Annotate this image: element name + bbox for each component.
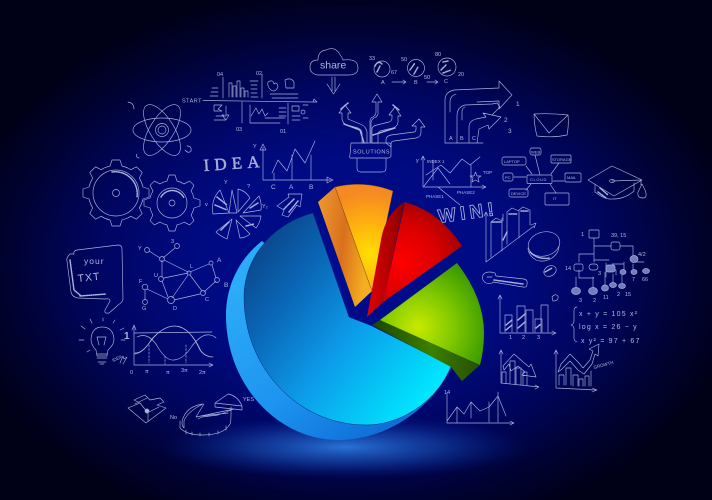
doodle: bent arrows ABC: C bbox=[472, 136, 476, 142]
doodle: line chart: Y bbox=[253, 144, 257, 150]
doodle: analytics chart with star: INDEX 1 bbox=[427, 159, 445, 164]
doodle: org tree bbox=[565, 230, 650, 304]
doodle: node network: C bbox=[205, 297, 209, 303]
doodle: cloud network: IT bbox=[553, 196, 557, 201]
doodle: falling arrow chart bbox=[499, 350, 539, 389]
doodle: node network: U bbox=[154, 273, 158, 279]
doodle: analytics chart with star bbox=[416, 156, 492, 205]
doodle: node network bbox=[138, 239, 228, 312]
doodle: bent arrows ABC: 1 bbox=[516, 101, 520, 108]
doodle: equations: x + y = 105 x² bbox=[579, 311, 638, 318]
heading: WIN!: WIN! bbox=[437, 199, 495, 228]
doodle: hatched bar chart: 3 bbox=[537, 335, 540, 341]
doodle: sine wave chart: 3π bbox=[181, 368, 188, 374]
doodle: org tree: 39, 15 bbox=[611, 233, 626, 239]
doodle: percent circles: 50 bbox=[401, 57, 407, 63]
doodle: sine wave chart bbox=[124, 325, 216, 376]
doodle: analytics chart with star: y bbox=[416, 158, 419, 164]
doodle: line chart: C bbox=[271, 184, 276, 191]
doodle: mountain line chart bbox=[444, 390, 514, 425]
red slice side bbox=[367, 202, 405, 317]
doodle: analytics chart with star: PHASE2 bbox=[457, 190, 475, 195]
doodle: 3D bar chart bbox=[484, 207, 536, 262]
doodle: equations: x y² = 97 + 67 bbox=[581, 338, 641, 345]
doodle: sine wave chart: 1 bbox=[124, 331, 130, 342]
doodle: cut pie chart: No bbox=[170, 415, 177, 421]
doodle: start timeline: 01 bbox=[280, 129, 286, 135]
doodle: cloud network: STORAGE bbox=[552, 157, 572, 162]
doodle: org tree: 2 bbox=[617, 292, 620, 298]
doodle: node network: A bbox=[217, 257, 222, 264]
doodle: speech bubble bbox=[67, 245, 123, 313]
icon: wrench bbox=[482, 272, 527, 287]
doodle: org tree: 1 bbox=[581, 232, 584, 238]
doodle: cloud network: DEVICE bbox=[511, 191, 526, 196]
doodle: coins bbox=[525, 228, 563, 279]
doodle: growth arrow chart bbox=[554, 344, 614, 392]
orange slice face bbox=[335, 184, 393, 291]
doodle: solutions box with arrows bbox=[339, 94, 425, 172]
doodle: percent circles: A bbox=[381, 80, 385, 86]
doodle: start timeline: 04 bbox=[217, 72, 223, 78]
doodle: bent arrows ABC bbox=[445, 81, 520, 143]
doodle: sine wave chart: 0 bbox=[130, 370, 133, 376]
doodle: bent arrows ABC: A bbox=[449, 136, 453, 142]
doodle: share cloud: share bbox=[320, 60, 346, 72]
doodle: percent circles: 20 bbox=[458, 72, 464, 78]
icon: open box bbox=[128, 395, 166, 423]
doodle: hatched pie: Y bbox=[224, 180, 228, 186]
doodle: cloud network: LAPTOP bbox=[504, 159, 520, 164]
doodle: node network: 3 bbox=[171, 239, 174, 245]
doodle: percent circles: 33 bbox=[369, 56, 375, 62]
doodle: sine wave chart: π bbox=[166, 370, 170, 376]
pie chart bbox=[226, 184, 484, 440]
pie: green slice bbox=[372, 263, 484, 381]
doodle: hatched pie: v bbox=[205, 202, 208, 208]
doodle: line chart bbox=[253, 141, 333, 191]
pie: red slice bbox=[367, 202, 462, 317]
doodle: cloud network: PC bbox=[505, 175, 511, 180]
doodle: hatched bar chart: 2 bbox=[522, 335, 525, 341]
doodle: share cloud bbox=[310, 49, 358, 94]
doodle: bent arrows ABC: 3 bbox=[508, 128, 512, 135]
icon: light bulb: IDEA bbox=[111, 354, 123, 363]
doodle: node network: D bbox=[173, 306, 177, 312]
pie: orange slice bbox=[318, 184, 393, 307]
doodle: org tree: 11 bbox=[603, 295, 609, 301]
doodle: bent arrows ABC: B bbox=[460, 136, 464, 142]
doodle: percent circles: C bbox=[444, 79, 448, 85]
doodle: node network: B bbox=[224, 282, 228, 289]
icon: light bulb bbox=[79, 318, 127, 364]
doodle: node network: L bbox=[190, 264, 193, 270]
doodle: start timeline: 02 bbox=[256, 71, 262, 77]
doodle: analytics chart with star: TOP bbox=[483, 170, 492, 175]
doodle: percent circles: 80 bbox=[435, 52, 441, 58]
doodle: cut pie chart bbox=[170, 394, 254, 436]
doodle: atom bbox=[128, 99, 191, 161]
doodle: sine wave chart: 2π bbox=[199, 370, 206, 376]
doodle: hatched pie bbox=[205, 180, 268, 239]
doodle: start timeline bbox=[182, 71, 317, 135]
doodle: node network: G bbox=[142, 306, 146, 312]
orange slice side bbox=[318, 187, 372, 307]
doodle: start timeline: 03 bbox=[236, 127, 242, 133]
red slice face bbox=[383, 202, 462, 302]
doodle: org tree: 2 bbox=[593, 298, 596, 304]
doodle: solutions box with arrows: SOLUTIONS bbox=[353, 150, 390, 156]
doodle: line chart: A bbox=[289, 184, 294, 191]
doodle: org tree: 15 bbox=[625, 292, 631, 298]
doodle: percent circles: 67 bbox=[391, 70, 397, 76]
doodle: speech bubble: your bbox=[84, 256, 105, 266]
doodle: striped arrow bbox=[277, 194, 302, 217]
doodle: hatched bar chart bbox=[498, 295, 558, 341]
doodle: mountain line chart: 14 bbox=[444, 390, 450, 396]
doodle: hatched pie: Y₂ bbox=[262, 204, 268, 210]
icon: graduation cap bbox=[588, 166, 646, 199]
doodle: org tree: 66 bbox=[642, 277, 648, 283]
doodle: percent circles: B bbox=[414, 80, 418, 86]
doodle: hatched bar chart: 1 bbox=[509, 335, 512, 341]
doodle: gears bbox=[82, 159, 200, 231]
doodle: cloud network bbox=[502, 148, 581, 205]
doodle: equations bbox=[571, 307, 641, 345]
doodle: percent circles bbox=[369, 52, 464, 86]
doodle: cloud network: CLOUD bbox=[530, 177, 547, 182]
doodles bbox=[67, 49, 650, 436]
doodle: growth arrow chart: GROWTH bbox=[593, 360, 614, 370]
doodle: analytics chart with star: PHASE1 bbox=[426, 194, 444, 199]
doodle: cloud network: WEB bbox=[531, 150, 540, 154]
green slice face bbox=[380, 263, 484, 365]
doodle: speech bubble: TXT bbox=[77, 271, 101, 285]
floor glow bbox=[160, 415, 530, 479]
heading: IDEA: IDEA bbox=[203, 152, 261, 175]
doodle: cloud network: MAIL bbox=[567, 175, 577, 180]
doodle: equations: log x = 26 − y bbox=[579, 324, 638, 331]
doodle: node network: Y bbox=[138, 246, 142, 252]
pie: outer blue shell bbox=[226, 241, 452, 440]
green slice side bbox=[372, 320, 480, 381]
doodle: line chart: B bbox=[309, 184, 313, 191]
doodle: hatched pie: ? bbox=[247, 184, 250, 190]
doodle: node network: F bbox=[139, 279, 143, 285]
doodle: sine wave chart: π bbox=[145, 369, 149, 375]
doodle: cut pie chart: YES bbox=[243, 397, 254, 403]
doodle: org tree: 3 bbox=[598, 271, 601, 277]
doodle: org tree: 14 bbox=[565, 266, 571, 272]
doodle: org tree: 3 bbox=[579, 298, 582, 304]
icon: large gear bbox=[82, 159, 150, 227]
doodle: bent arrows ABC: 2 bbox=[504, 117, 508, 124]
icon: small gear bbox=[144, 175, 200, 231]
doodle: percent circles: 50 bbox=[424, 75, 430, 81]
icon: envelope bbox=[534, 114, 568, 137]
doodle: start timeline: START bbox=[182, 98, 202, 104]
doodle: org tree: 7 bbox=[632, 277, 635, 283]
doodle: org tree: 4/2 bbox=[638, 252, 646, 258]
pie: blue main face bbox=[244, 213, 451, 425]
